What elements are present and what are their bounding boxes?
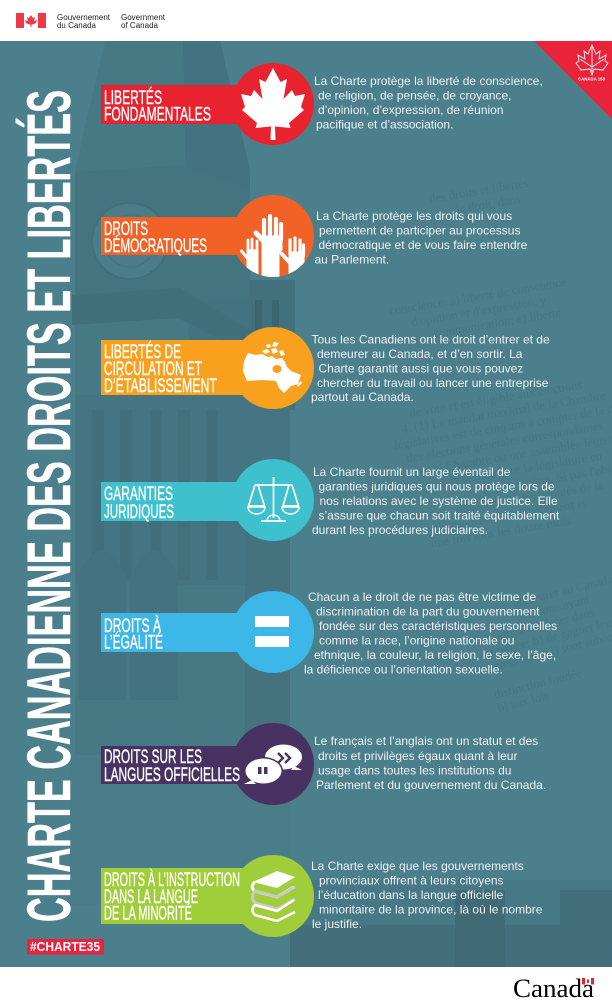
label: Libertés de circulation: D’ÉTABLISSEMENT	[104, 374, 217, 397]
background: faint charter page text: législative. 5. Le Parlement et	[437, 496, 587, 534]
corner ribbon: Canada 150	[534, 41, 612, 119]
text: description: discrimination de la part du gouvernement	[316, 604, 540, 618]
label: Garanties juridiques	[104, 483, 174, 523]
text: description: comme la race, l’origine nationale ou	[319, 634, 514, 648]
label: Droits à l'égalité: DROITS À	[104, 614, 161, 637]
text: description: Chacun a le droit de ne pas être victime de	[308, 590, 536, 604]
text: description: démocratique et de vous faire entendre	[318, 238, 528, 252]
text: description: droits et privilèges égaux quant à leur	[318, 749, 517, 763]
label: Droits sur les langues officielles	[104, 746, 240, 786]
background: faint charter page text: personne ayant	[514, 592, 591, 624]
text: description: Le français et l’anglais ont un statut et des	[314, 734, 538, 748]
background: faint charter page text: de se déplacer dans	[498, 605, 596, 642]
background: faint charter page text: plus du tiers des députés de la	[455, 478, 605, 516]
label: Droits à l'instruction: DANS LA LANGUE	[104, 886, 198, 908]
text: description	[314, 734, 546, 792]
text: description: nos relations avec le système de justice. Elle	[320, 494, 558, 508]
text: description	[314, 209, 528, 266]
section: Libertés de circulation et d'établissement	[101, 327, 550, 409]
icon: equals sign	[101, 591, 314, 673]
text: description: s’assure que chacun soit traité équitablement	[318, 508, 560, 522]
label: Libertés de circulation: LIBERTÉS DE	[104, 340, 181, 363]
text: description: minoritaire de la province, là où le nombre	[319, 902, 543, 916]
icon: Canadian flag	[16, 13, 46, 28]
background: faint charter page text: des droits et libertés	[428, 176, 530, 206]
text: description: garanties juridiques qui nous protège lors de	[318, 480, 555, 494]
icon: raised hands	[101, 195, 314, 280]
text: description	[304, 590, 557, 676]
label: Droits à l'instruction: DE LA MINORITÉ	[104, 902, 192, 924]
label: Libertés de circulation	[104, 340, 217, 397]
text: Gouvernement du Canada: du Canada	[57, 21, 97, 30]
text: description	[312, 465, 560, 537]
text: description	[314, 74, 543, 132]
text: description: La Charte exige que les gouvernements	[311, 859, 524, 873]
text: description: l’éducation dans la langue officielle	[318, 888, 504, 902]
icon: Canada 150 maple leaf	[576, 45, 608, 75]
text: description: ethnique, la couleur, la religion, le sexe, l’âge,	[314, 648, 556, 662]
text: description: La Charte fournit un large éventail de	[313, 465, 511, 479]
label: Droits démocratiques	[104, 218, 207, 257]
section: Droits sur les langues officielles	[101, 723, 546, 805]
text: description: usage dans toutes les institutions du	[318, 764, 511, 778]
background: faint charter page text: paragraphe (2) sont subor	[486, 629, 612, 674]
icon: wordmark flag	[582, 978, 594, 984]
text: description: Parlement et du gouvernement du Canada.	[316, 778, 546, 792]
text: description: La Charte protège les droits qui vous	[316, 209, 512, 223]
text: description: Charte garantit aussi que vous pouvez	[318, 362, 523, 376]
hashtag badge: #CHARTE35	[30, 940, 100, 954]
label: Garanties juridiques: JURIDIQUES	[104, 501, 174, 523]
text: Gouvernement du Canada: Gouvernement	[57, 13, 111, 22]
label: Droits démocratiques: DÉMOCRATIQUES	[104, 234, 207, 257]
header: Government of Canada signature	[16, 13, 166, 30]
text: Government of Canada	[121, 13, 166, 30]
label: Libertés fondamentales: LIBERTÉS	[104, 86, 162, 109]
background: faint charter page text: b) aux lois	[496, 689, 551, 715]
text: description: La Charte protège la liberté de conscience,	[314, 74, 543, 88]
text: description: fondée sur des caractéristiques personnelles	[319, 619, 557, 633]
background: faint charter page text: demeurer au Canada	[511, 572, 612, 610]
section: Droits à l'égalité	[101, 590, 557, 676]
text: description: provinciaux offrent à leurs citoyens	[319, 874, 504, 888]
text: description: durant les procédures judiciaires.	[312, 523, 488, 537]
background: faint charter page text: communication; c) liberté	[432, 305, 563, 340]
footer: Canada wordmark: Canada	[513, 974, 594, 1003]
background: faint charter page text: une fois tous les douze mois	[430, 513, 572, 550]
label: Droits à l'instruction	[104, 868, 240, 924]
label: Droits à l'instruction: DROITS À L’INSTRUCTION	[104, 868, 240, 891]
text: description: le justifie.	[312, 917, 362, 931]
label: Droits à l'égalité	[104, 614, 163, 654]
text: description	[311, 859, 543, 931]
label: Garanties juridiques: GARANTIES	[104, 483, 173, 505]
label: Libertés fondamentales: FONDAMENTALES	[104, 104, 211, 126]
label: Libertés de circulation: CIRCULATION ET	[104, 358, 202, 380]
text: description: de religion, de pensée, de croyance,	[318, 88, 511, 102]
text: description: Tous les Canadiens ont le droit d’entrer et de	[312, 332, 550, 346]
background: faint charter page text: 4. (1) Le mandat maximal de la Chambre	[401, 388, 607, 436]
background: faint charter page text: de vote et est éligible aux élections	[408, 377, 583, 420]
text: description: la déficience ou l’orientation sexuelle.	[304, 662, 503, 676]
text: description: permettent de participer au processus	[319, 224, 520, 238]
background: faint charter page text: conscience: a) liberté de conscience	[388, 275, 568, 318]
label: Droits sur les langues officielles: LANGUES OFFICIELLES	[104, 764, 240, 786]
text: description: au Parlement.	[314, 252, 389, 266]
icon: map of Canada	[101, 327, 314, 409]
section: Garanties juridiques	[101, 459, 560, 541]
text: description: chercher du travail ou lancer une entreprise	[317, 376, 549, 390]
text: description	[311, 332, 550, 404]
text: description: partout au Canada.	[311, 390, 414, 404]
background: faint charter page text: de droit, dans	[452, 192, 522, 217]
section: Droits à l'instruction dans la langue de la minorité	[101, 855, 543, 937]
icon: scales of justice	[101, 459, 314, 541]
background: faint charter page text: distinction fondée	[493, 666, 584, 701]
text: CANADA 150: CANADA 150	[578, 76, 605, 82]
text: Gouvernement du Canada	[57, 13, 111, 30]
label: Droits à l'égalité: L’ÉGALITÉ	[104, 630, 163, 654]
icon: speech bubbles	[101, 723, 314, 805]
text: description: demeurer au Canada, et d’en sortir. La	[317, 347, 523, 361]
background: faint charter page text	[388, 176, 612, 715]
text: description: d’opinion, d’expression, de réunion	[318, 103, 503, 117]
section: Droits démocratiques	[101, 195, 528, 280]
background: faint charter page text: prolongé pour la législature en	[450, 448, 604, 487]
icon: maple leaf	[101, 63, 314, 145]
text: Government of Canada: Government	[121, 13, 166, 22]
icon: stack of books	[101, 855, 314, 937]
background: faint charter page text: d'opinion et d'expression, y	[410, 293, 548, 329]
label: Droits démocratiques: DROITS	[104, 218, 148, 240]
background: faint charter page text: des élections générales correspondantes.	[406, 418, 607, 465]
section: Libertés fondamentales	[101, 63, 543, 145]
text: description: pacifique et d’association.	[316, 118, 453, 132]
label: Droits sur les langues officielles: DROITS SUR LES	[104, 746, 202, 768]
text: Government of Canada: of Canada	[121, 21, 159, 30]
label: Libertés fondamentales	[104, 86, 211, 126]
